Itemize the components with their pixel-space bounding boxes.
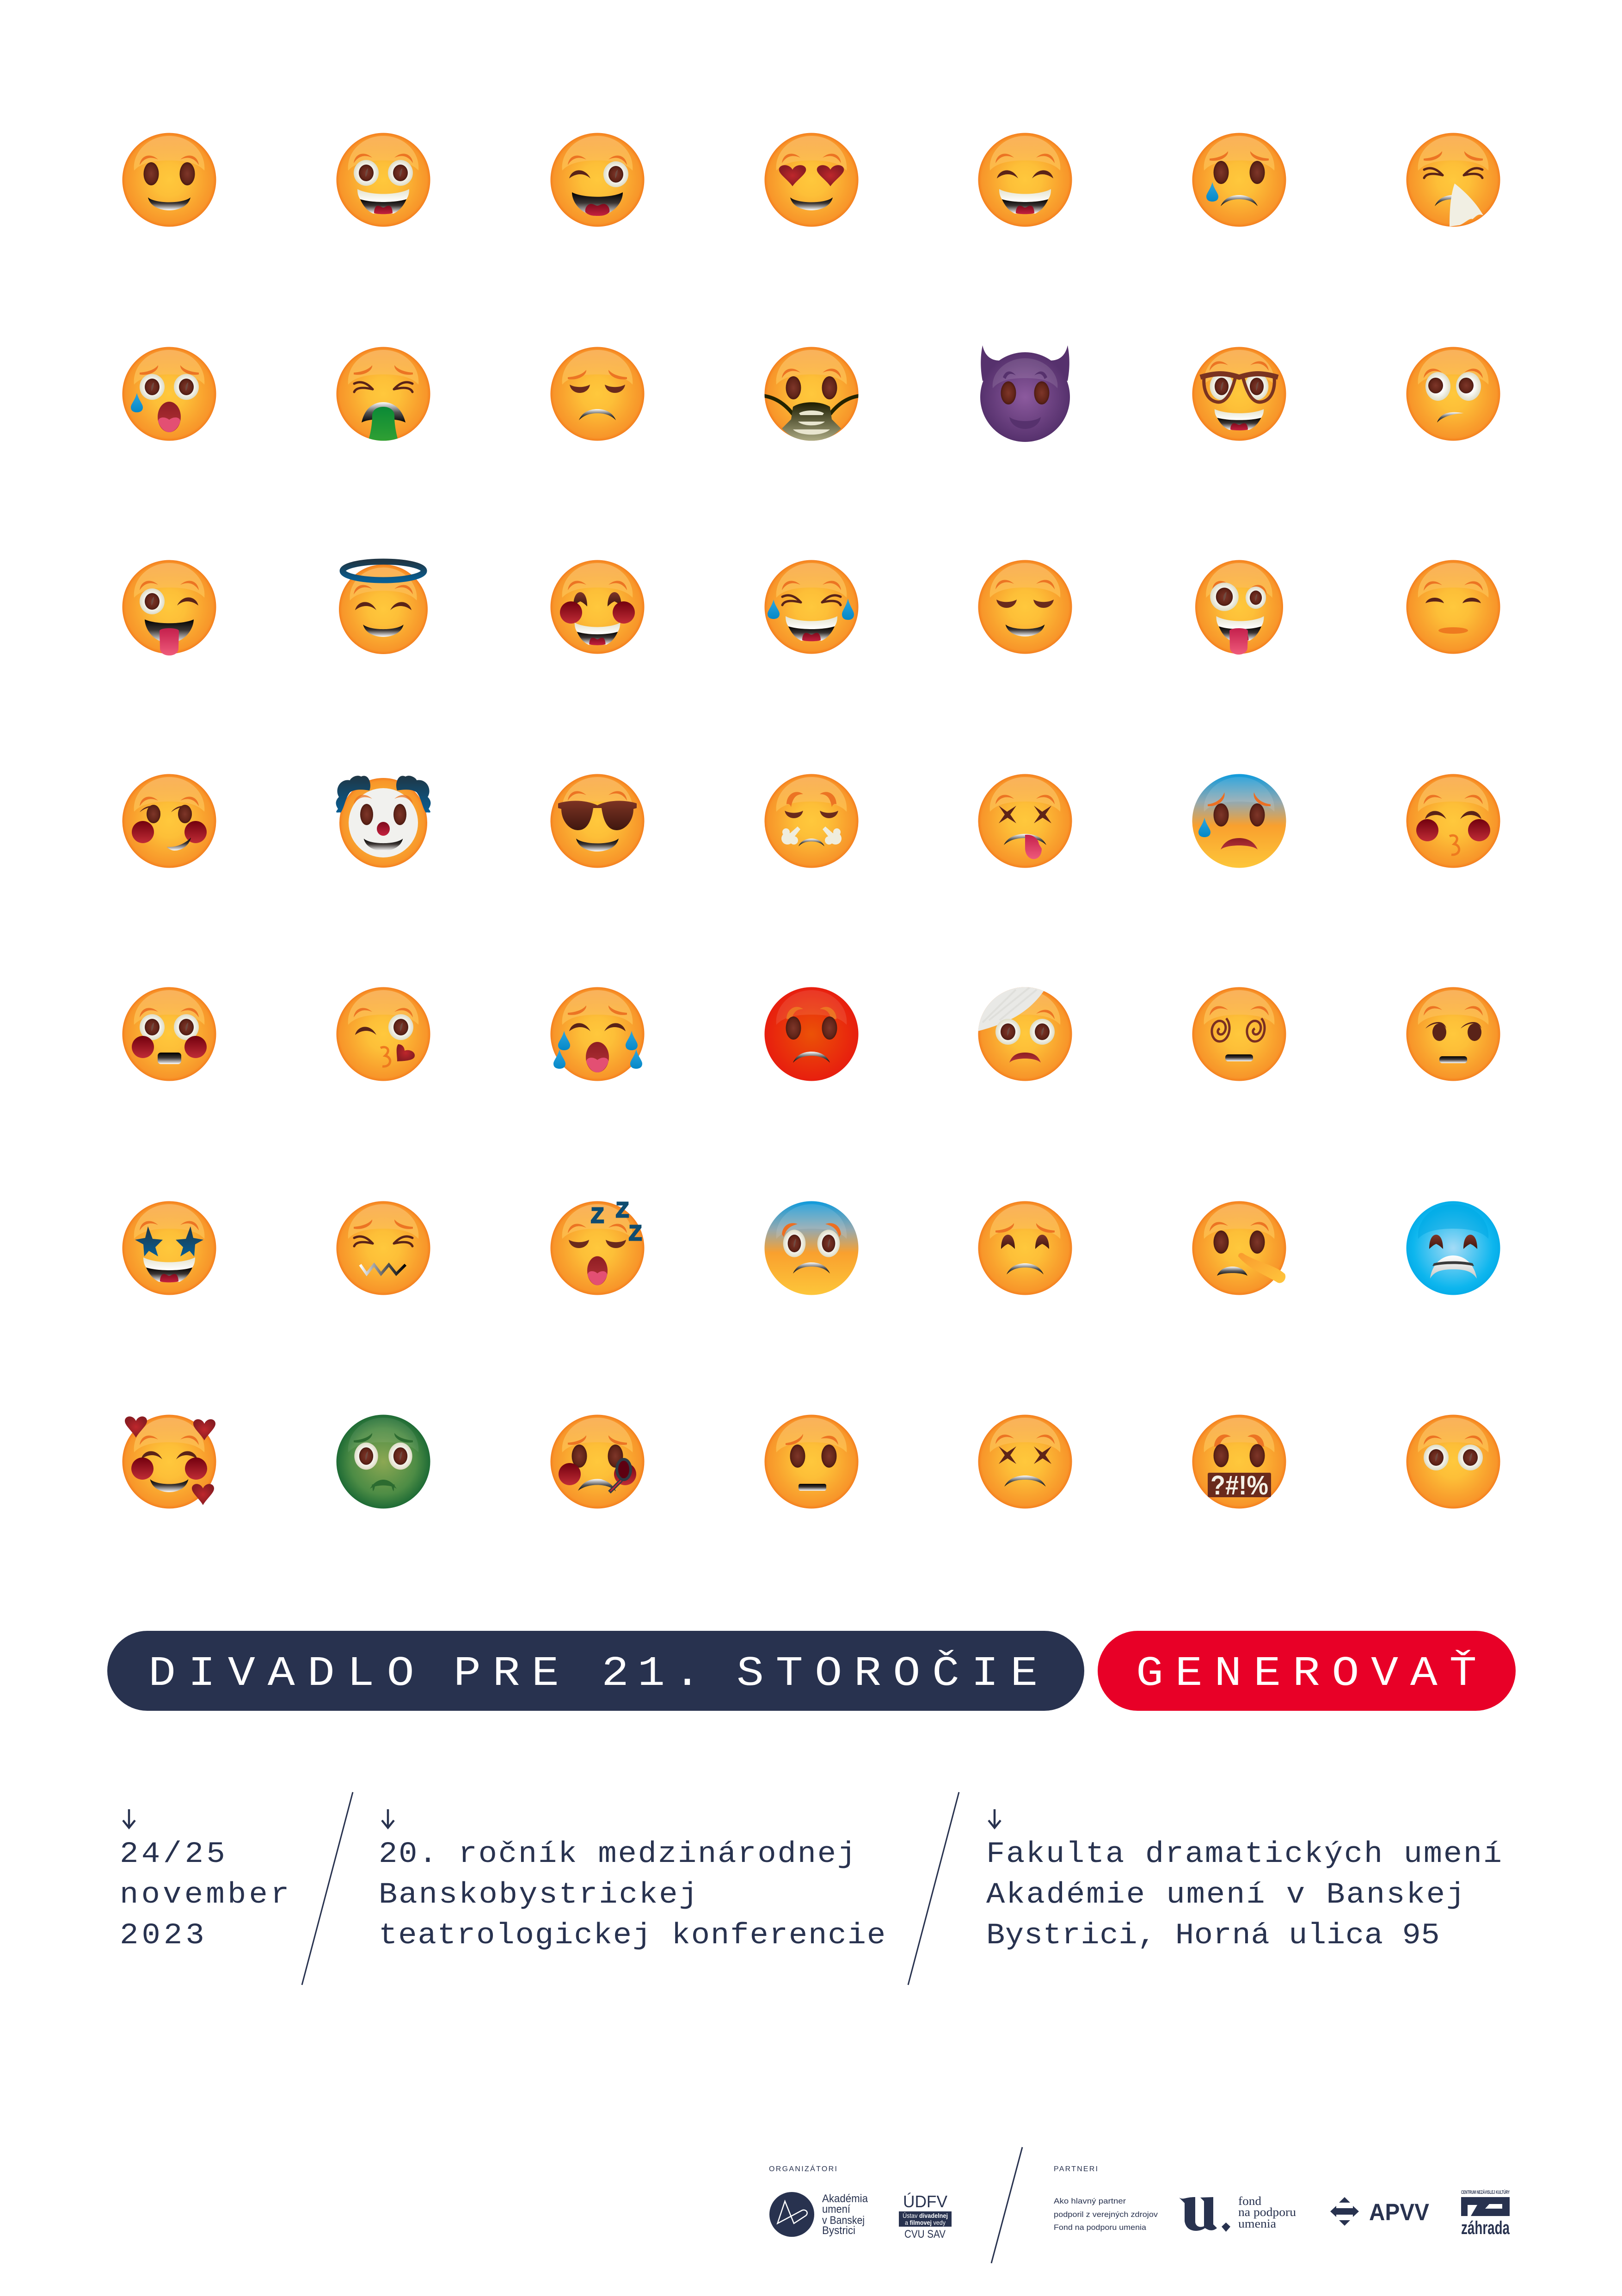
emoji: clown <box>336 776 430 868</box>
emoji: swearing symbols <box>1192 1414 1286 1509</box>
emoji: sleeping with z letters: Z <box>616 1198 629 1222</box>
info: venue: Bystrici, Horná ulica 95 <box>986 1918 1440 1953</box>
footer divider slash <box>991 2147 1022 2263</box>
emoji: dizzy with tongue <box>978 774 1072 868</box>
emoji: shocked with sweat <box>122 347 216 441</box>
emoji: blowing kiss <box>337 987 430 1081</box>
emoji: steam from nose <box>765 774 858 868</box>
emoji: cold sweat gradient <box>1192 774 1286 868</box>
title text: 21. <box>602 1650 701 1698</box>
emoji: sad arch eyes <box>978 1201 1072 1295</box>
emoji: sleeping with z letters: Z <box>629 1221 642 1245</box>
emoji: purple devil <box>980 345 1070 442</box>
title text <box>148 1650 1038 1698</box>
info: venue <box>986 1809 1502 1953</box>
emoji: crying sad <box>1192 133 1286 227</box>
emoji: blushing grin <box>550 560 645 654</box>
emoji: freezing blue <box>1407 1201 1500 1295</box>
emoji: vomiting <box>337 347 430 442</box>
title text: STOROČIE <box>737 1650 1038 1698</box>
emoji: sleeping with z letters <box>550 1198 645 1295</box>
emoji: sleeping with z letters: Z <box>591 1203 604 1227</box>
logo: UDFV: Ústav divadelnej <box>903 2212 948 2219</box>
logo: AUBB: Akadémia <box>822 2192 868 2205</box>
logo: APVV <box>1330 2197 1429 2226</box>
emoji: looking up with frown <box>1407 347 1500 441</box>
emoji: relieved <box>978 560 1072 654</box>
emoji: staring no mouth <box>1407 1414 1500 1509</box>
info: date <box>120 1809 289 1953</box>
emoji: swearing symbols: ?#!% <box>1210 1470 1268 1500</box>
emoji: winking laugh <box>550 133 645 227</box>
emoji: laughing closed eyes <box>978 133 1072 227</box>
info: date: november <box>120 1878 289 1912</box>
emoji: pensive <box>550 347 645 441</box>
emoji: wink with tongue <box>122 560 216 655</box>
emoji: neutral with lashes <box>1407 987 1500 1081</box>
title bar <box>107 1631 1084 1711</box>
arrow <box>382 1809 394 1828</box>
arrow <box>989 1809 1001 1828</box>
emoji: spiral dizzy eyes <box>1192 987 1286 1081</box>
emoji: crying loudly <box>550 987 645 1081</box>
emoji: tears of joy <box>765 560 858 654</box>
emoji: crazy tongue out <box>1195 560 1283 655</box>
button text: GENEROVAŤ <box>1136 1650 1477 1698</box>
generate button <box>1098 1631 1516 1711</box>
logo: Zahrada: záhrada <box>1461 2218 1510 2238</box>
logo: AUBB: v Banskej <box>822 2214 865 2227</box>
emoji: angry red <box>765 987 858 1081</box>
emoji: sunglasses <box>550 774 645 868</box>
emoji: halo angel <box>339 562 428 654</box>
organizers block <box>769 2164 952 2241</box>
emoji: expressionless calm <box>1407 560 1500 654</box>
logo: Zahrada <box>1461 2189 1510 2238</box>
info: date: 2023 <box>120 1918 204 1953</box>
divider slash <box>302 1792 353 1985</box>
logo: UDFV <box>899 2192 952 2241</box>
logo: AUBB: Bystrici <box>822 2224 855 2237</box>
emoji: sick green <box>337 1414 430 1509</box>
logo: APVV: APVV <box>1369 2199 1429 2225</box>
logo: UDFV: a filmovej vedy <box>905 2219 946 2226</box>
partners block <box>1054 2165 1510 2238</box>
info: date: 24/25 <box>120 1837 225 1871</box>
title text: DIVADLO <box>148 1650 414 1698</box>
emoji: star eyes <box>122 1201 216 1295</box>
emoji: smirk with blush <box>122 774 216 868</box>
logo: AUBB <box>769 2192 868 2237</box>
organizers label: ORGANIZÁTORI <box>769 2164 837 2173</box>
logo: UDFV: CVU SAV <box>904 2228 946 2241</box>
arrow <box>123 1809 135 1828</box>
partners label: PARTNERI <box>1054 2165 1098 2173</box>
emoji: bandaged head <box>974 983 1072 1081</box>
emoji: smile <box>122 133 216 227</box>
info: conference <box>379 1809 885 1953</box>
emoji: dead x eyes frown <box>978 1414 1072 1509</box>
info: venue: Fakulta dramatických umení <box>986 1837 1502 1871</box>
info: venue: Akadémie umení v Banskej <box>986 1878 1465 1912</box>
logo: FPU: fond <box>1238 2194 1261 2208</box>
emoji: long nose liar <box>1192 1201 1286 1295</box>
partner note: Fond na podporu umenia <box>1054 2223 1147 2232</box>
emoji: frightened cold gradient <box>765 1201 858 1295</box>
emoji: tissue sneeze <box>1407 133 1500 227</box>
emoji: hearts around smile <box>122 1414 216 1509</box>
partner note <box>1054 2197 1158 2232</box>
emoji: zigzag mouth <box>337 1201 430 1295</box>
divider slash <box>908 1792 959 1985</box>
partner note: Ako hlavný partner <box>1054 2197 1126 2205</box>
logo: Zahrada: CENTRUM NEZÁVISLEJ KULTÚRY <box>1461 2189 1510 2195</box>
emoji: raised brow neutral <box>765 1414 858 1509</box>
logo: FPU <box>1179 2194 1296 2232</box>
logo: FPU: na podporu <box>1238 2205 1296 2219</box>
info: conference: teatrologickej konferencie <box>379 1918 885 1953</box>
emoji: flushed blush <box>122 987 216 1081</box>
partner note: podporil z verejných zdrojov <box>1054 2210 1158 2219</box>
info: conference: 20. ročník medzinárodnej <box>379 1837 856 1871</box>
emoji: thermometer fever <box>550 1414 645 1509</box>
emoji: heart eyes <box>765 133 858 227</box>
emoji: medical mask <box>763 347 860 441</box>
logo: FPU: umenia <box>1238 2217 1276 2230</box>
info: conference: Banskobystrickej <box>379 1878 698 1912</box>
title text: PRE <box>454 1650 559 1698</box>
emoji: nerd with glasses <box>1192 347 1286 441</box>
logo: AUBB: umení <box>822 2203 850 2216</box>
emoji: grin with open eyes <box>337 133 430 227</box>
emoji: kiss with blush <box>1407 774 1500 868</box>
logo: UDFV: ÚDFV <box>903 2192 947 2211</box>
emoji grid <box>122 133 1500 1509</box>
